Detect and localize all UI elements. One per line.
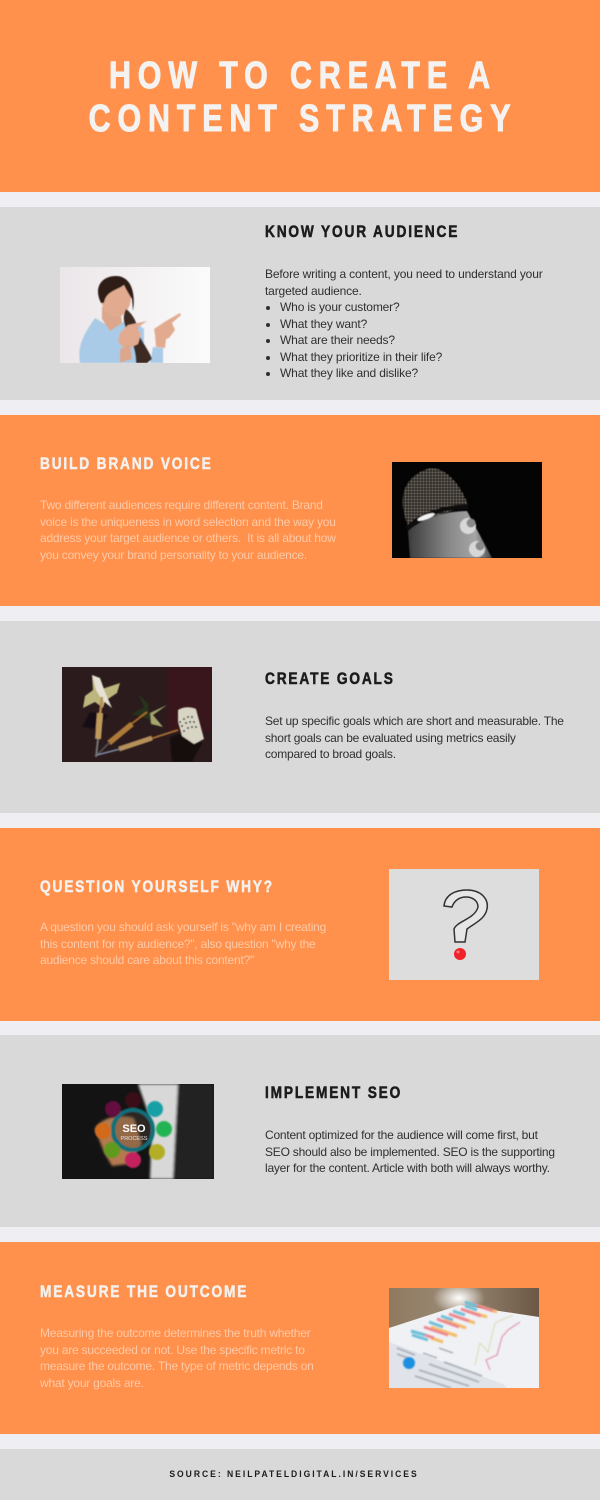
text: why: A question you should ask yourself is "why am I creating (40, 920, 326, 934)
photo: microphone (392, 462, 542, 558)
text: audience questions (265, 267, 543, 380)
text: seo: Content optimized for the audience will come first, but (265, 1128, 538, 1142)
text: outcome: measure the outcome. The type of metric depends on (40, 1359, 314, 1373)
title (89, 55, 517, 140)
text: outcome: you are succeeded or not. Use the specific metric to (40, 1342, 305, 1356)
text: why: audience should care about this content?" (40, 953, 254, 967)
text: goals: Set up specific goals which are short and measurable. The (265, 714, 564, 728)
text: brand voice (40, 498, 336, 562)
text: seo: layer for the content. Article with both will always worthy. (265, 1161, 550, 1175)
text: seo (265, 1128, 555, 1175)
panel: create goals (0, 621, 600, 813)
text: audience questions: targeted audience. (265, 284, 362, 298)
panel: source footer (0, 1449, 600, 1500)
heading: create goals: CREATE GOALS (265, 670, 395, 688)
text: outcome: what your goals are. (40, 1376, 144, 1390)
title: CONTENT STRATEGY (89, 98, 517, 140)
photo: question mark (389, 869, 539, 980)
text: goals: short goals can be evaluated using metrics easily (265, 730, 516, 744)
text: audience questions: What they like and dislike? (280, 366, 418, 380)
heading: measure the outcome: MEASURE THE OUTCOME (40, 1283, 248, 1301)
photo: seo process: SEO (122, 1123, 146, 1135)
text: why: this content for my audience?", also question "why the (40, 936, 315, 950)
text: goals: compared to broad goals. (265, 747, 396, 761)
photo: woman pointing (60, 267, 210, 363)
panel: know your audience (0, 207, 600, 400)
text: seo: SEO should also be implemented. SEO is the supporting (265, 1144, 555, 1158)
text: audience questions: Who is your customer? (280, 300, 400, 314)
panel: question yourself why (0, 828, 600, 1021)
source text: SOURCE: NEILPATELDIGITAL.IN/SERVICES (169, 1469, 419, 1480)
photo: seo process: PROCESS (121, 1136, 148, 1142)
header banner (0, 0, 600, 192)
photo: darts (62, 667, 212, 762)
text: brand voice: you convey your brand personality to your audience. (40, 548, 307, 562)
text: audience questions: What are their needs? (280, 333, 395, 347)
photo: seo process (62, 1084, 214, 1179)
heading: question yourself why: QUESTION YOURSELF WHY? (40, 878, 274, 896)
text: outcome: Measuring the outcome determines the truth whether (40, 1326, 310, 1340)
text: brand voice: address your target audience or others. It is all about how (40, 531, 336, 545)
heading: build brand voice: BUILD BRAND VOICE (40, 455, 213, 473)
title: HOW TO CREATE A (109, 55, 497, 97)
panel: build brand voice (0, 415, 600, 606)
text: audience questions: What they prioritize in their life? (280, 350, 442, 364)
text: outcome (40, 1326, 314, 1390)
text: audience questions: What they want? (280, 316, 367, 330)
text: why (40, 920, 326, 967)
panel: measure the outcome (0, 1242, 600, 1434)
text: audience questions: Before writing a content, you need to understand your (265, 267, 543, 281)
panel: implement seo (0, 1035, 600, 1227)
heading: implement seo: IMPLEMENT SEO (265, 1084, 402, 1102)
text: brand voice: Two different audiences require different content. Brand (40, 498, 323, 512)
text: brand voice: voice is the uniqueness in word selection and the way you (40, 514, 336, 528)
photo: charts on paper (389, 1288, 539, 1388)
heading: know your audience: KNOW YOUR AUDIENCE (265, 223, 459, 241)
text: goals (265, 714, 564, 761)
